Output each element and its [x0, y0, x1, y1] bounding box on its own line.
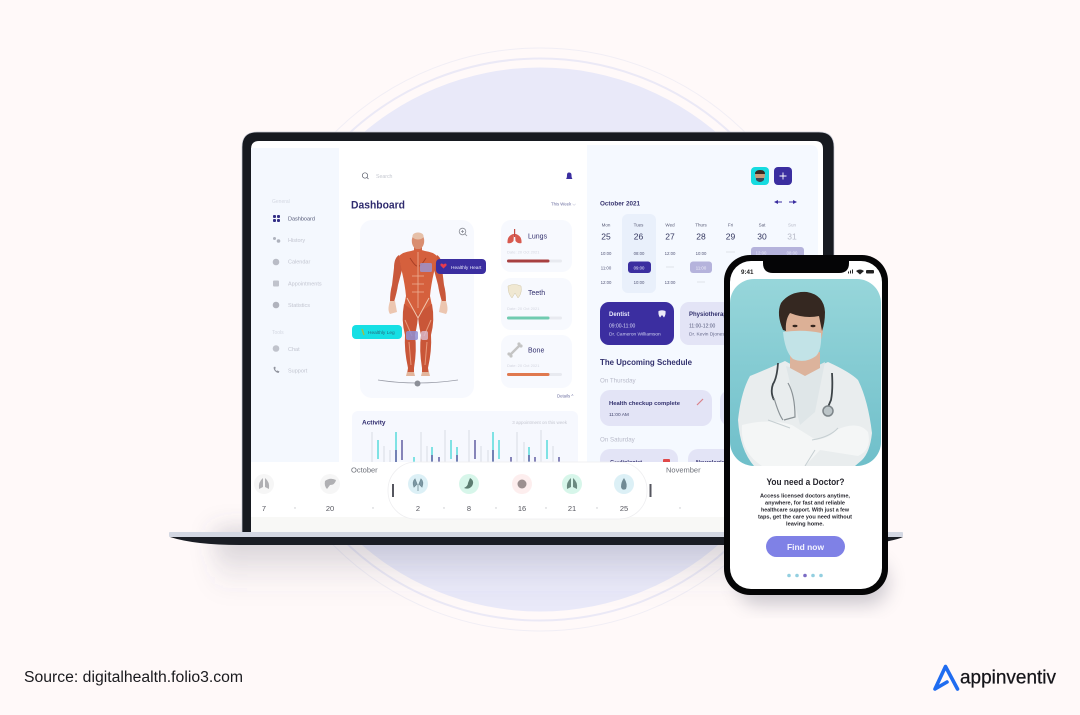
- surgical mask: [783, 331, 821, 361]
- time slots: 08:00: [787, 250, 798, 256]
- schedule card: cardiologist: [600, 449, 678, 479]
- status bar: 9:41: [741, 269, 754, 276]
- nav: appointments: Appointments: [288, 281, 322, 287]
- navy bars: [396, 440, 559, 462]
- date headers: Thurs: [695, 222, 707, 228]
- time slots: 10:00: [634, 280, 645, 285]
- schedule card: health checkup: 11:00 AM: [609, 412, 629, 418]
- panel: calendar and schedule: [587, 145, 818, 479]
- phone shadow: [738, 560, 888, 605]
- timeline highlight capsule: [388, 462, 647, 519]
- doctor eyes: [792, 325, 816, 327]
- appointment card: physiotherapy: 11:00-12:00: [689, 324, 716, 330]
- timeline numbers: 21: [568, 504, 576, 513]
- appointment card: physiotherapy: Dr. Kevin Djones: [689, 332, 725, 338]
- icon: bell: [566, 172, 572, 179]
- tag: healthy leg: Healthly Leg: [368, 330, 395, 336]
- timeline icons: [254, 474, 634, 494]
- phone screen: [730, 261, 882, 589]
- avatar: [751, 167, 769, 185]
- laptop: [169, 132, 903, 545]
- heading: upcoming schedule: The Upcoming Schedule: [600, 357, 692, 367]
- date headers: [602, 223, 796, 226]
- today column highlight: [622, 214, 656, 293]
- laptop shadow: [215, 530, 865, 592]
- nav: calendar: [273, 259, 310, 266]
- logo wordmark: appinventiv: [960, 668, 1056, 688]
- nav: chat: Chat: [288, 347, 300, 353]
- date headers: Sun: [788, 222, 796, 228]
- date numbers: 29: [726, 232, 735, 242]
- time slots: 13:00: [665, 280, 676, 285]
- icon: bone: [507, 342, 523, 358]
- schedule card: health checkup: [600, 390, 712, 426]
- label: on saturday: On Saturday: [600, 436, 636, 444]
- anatomy figure: [388, 232, 448, 376]
- phone body text: healthcare support. With just a few: [761, 508, 850, 514]
- date numbers: 25: [601, 232, 611, 242]
- timeline numbers: 25: [620, 504, 628, 513]
- appointment card: dentist: Dr. Cameron Williamson: [609, 332, 661, 338]
- date headers: Wed: [665, 222, 675, 228]
- sidebar: General: [272, 199, 290, 205]
- phone notch: [763, 261, 849, 273]
- phone body text: [758, 494, 852, 528]
- month labels: [351, 466, 701, 474]
- stethoscope: [772, 363, 833, 420]
- phone heading: You need a Doctor?: [766, 477, 844, 487]
- phone body text: taps, get the care you need without: [758, 514, 852, 520]
- icon: calendar arrows: [774, 200, 797, 204]
- button: find now: Find now: [787, 542, 824, 552]
- date numbers: 31: [787, 232, 797, 242]
- crossed arms: [742, 422, 869, 466]
- time slots: 10:00: [601, 251, 612, 256]
- date numbers: 27: [665, 232, 675, 242]
- date numbers: [602, 234, 796, 240]
- calendar heading: October 2021: [600, 200, 640, 208]
- background circle with rings: [248, 48, 832, 631]
- schedule card: next: [720, 390, 780, 426]
- phone body: [724, 255, 888, 595]
- month labels: November: [666, 466, 701, 474]
- timeline numbers: 20: [326, 504, 334, 513]
- panel: activity chart: 3 appointment on this week: [512, 420, 568, 425]
- time slots: 08:00: [634, 251, 645, 256]
- schedule card: neurologist: Neurologist: [696, 460, 727, 466]
- nav: history: History: [288, 238, 305, 244]
- timeline numbers: 2: [416, 504, 420, 513]
- status bar: [741, 269, 874, 276]
- nav: dashboard: [273, 215, 315, 222]
- timeline numbers: [262, 504, 628, 513]
- schedule card: cardiologist: Cardiologist: [610, 460, 642, 466]
- doctor coat: [738, 361, 872, 466]
- nav: calendar: Calendar: [288, 260, 310, 266]
- tag: healthy leg: [352, 325, 402, 339]
- date headers: Tues: [634, 222, 644, 228]
- nav: statistics: Statistics: [288, 303, 310, 309]
- date numbers: 28: [696, 232, 706, 242]
- card: lungs: [507, 229, 562, 262]
- panel: body model: [352, 228, 486, 386]
- time slots: [601, 247, 804, 285]
- appointment card: dentist: Dentist: [609, 312, 629, 318]
- card: teeth: [507, 284, 562, 320]
- timeline ticks: [294, 507, 681, 509]
- appointment card: dentist: [600, 302, 674, 345]
- platform arc: [378, 380, 458, 386]
- doctor photo: [730, 279, 881, 466]
- phone: [724, 255, 888, 595]
- phone body text: anywhere, for fast and reliable: [765, 500, 845, 506]
- nav: statistics: [273, 302, 310, 309]
- panel: activity chart: [352, 411, 578, 462]
- icon: tooth: [508, 284, 521, 298]
- search bar: Search: [376, 174, 393, 180]
- schedule card: neurologist: [688, 449, 748, 479]
- nav: support: Support: [288, 368, 308, 374]
- appointment card: physiotherapy: [680, 302, 754, 345]
- card: teeth: Date: 20 Oct 2021: [507, 306, 540, 311]
- date headers: Mon: [602, 222, 611, 228]
- pagination dots: [787, 574, 823, 577]
- time slots: 09:00: [634, 266, 645, 270]
- logo mark: [935, 666, 958, 689]
- icon: lungs: [507, 229, 522, 243]
- nav: support: [274, 366, 308, 374]
- date numbers: 26: [634, 232, 643, 242]
- timeline numbers: 7: [262, 504, 266, 513]
- button: find now: [766, 536, 845, 557]
- card: lungs: Date: 20 Oct 2021: [507, 250, 540, 254]
- time slots: 11:00: [601, 266, 612, 270]
- laptop screen: [251, 141, 823, 532]
- this week filter: This Week ⌵: [551, 202, 576, 206]
- timeline strip: [251, 462, 823, 532]
- doctor hair: [779, 292, 825, 331]
- nav: appointments: [273, 280, 322, 286]
- card: teeth: Teeth: [528, 290, 545, 297]
- card: bone: Bone: [528, 348, 544, 354]
- capsule handles: [392, 484, 652, 497]
- source caption: Source: digitalhealth.folio3.com: [24, 669, 243, 686]
- doctor neck and face: [790, 352, 820, 376]
- teal bars: [378, 432, 547, 462]
- card: bone: Date: 20 Oct 2021: [507, 363, 540, 368]
- date headers: Sat: [759, 222, 766, 228]
- add button: [774, 167, 792, 185]
- time slots: 12:00: [665, 251, 676, 256]
- month labels: October: [351, 466, 378, 474]
- date headers: Fri: [728, 222, 733, 228]
- appointment card: dentist: 09:00-11:00: [609, 324, 636, 330]
- laptop base: [169, 532, 903, 545]
- gray bars: [372, 430, 553, 462]
- panel: activity chart: Activity: [362, 420, 386, 426]
- doctor shirt: [786, 362, 825, 425]
- timeline numbers: 8: [467, 504, 471, 513]
- icon: zoom: [459, 228, 467, 236]
- schedule card: health checkup: Health checkup complete: [609, 401, 681, 407]
- time slots: 10:00: [696, 251, 707, 256]
- heading: dashboard: Dashboard: [351, 200, 405, 212]
- details link: Details ^: [557, 394, 573, 398]
- appinventiv logo: [935, 666, 1056, 689]
- tag: healthy heart: [436, 259, 486, 274]
- date numbers: 30: [757, 232, 767, 242]
- sidebar: [251, 148, 339, 462]
- label: on thursday: On Thursday: [600, 378, 637, 384]
- phone body text: Access licensed doctors anytime,: [760, 494, 851, 500]
- appointment card: physiotherapy: Physiotherapy: [689, 312, 731, 318]
- card: bone: [507, 342, 562, 376]
- time slots: 12:00: [756, 250, 767, 256]
- laptop bezel: [242, 132, 834, 537]
- nav: chat: [273, 345, 300, 353]
- nav: dashboard: Dashboard: [288, 216, 315, 222]
- time slots: 11:00: [696, 266, 707, 270]
- card: lungs: Lungs: [528, 234, 548, 240]
- nav: history: [273, 237, 305, 243]
- timeline numbers: 16: [518, 504, 526, 513]
- sidebar: Tools: [272, 330, 284, 336]
- phone body text: leaving home.: [786, 522, 825, 528]
- tag: healthy heart: Healthly Heart: [451, 265, 482, 271]
- time slots: 12:00: [601, 280, 612, 285]
- search bar: [362, 173, 393, 180]
